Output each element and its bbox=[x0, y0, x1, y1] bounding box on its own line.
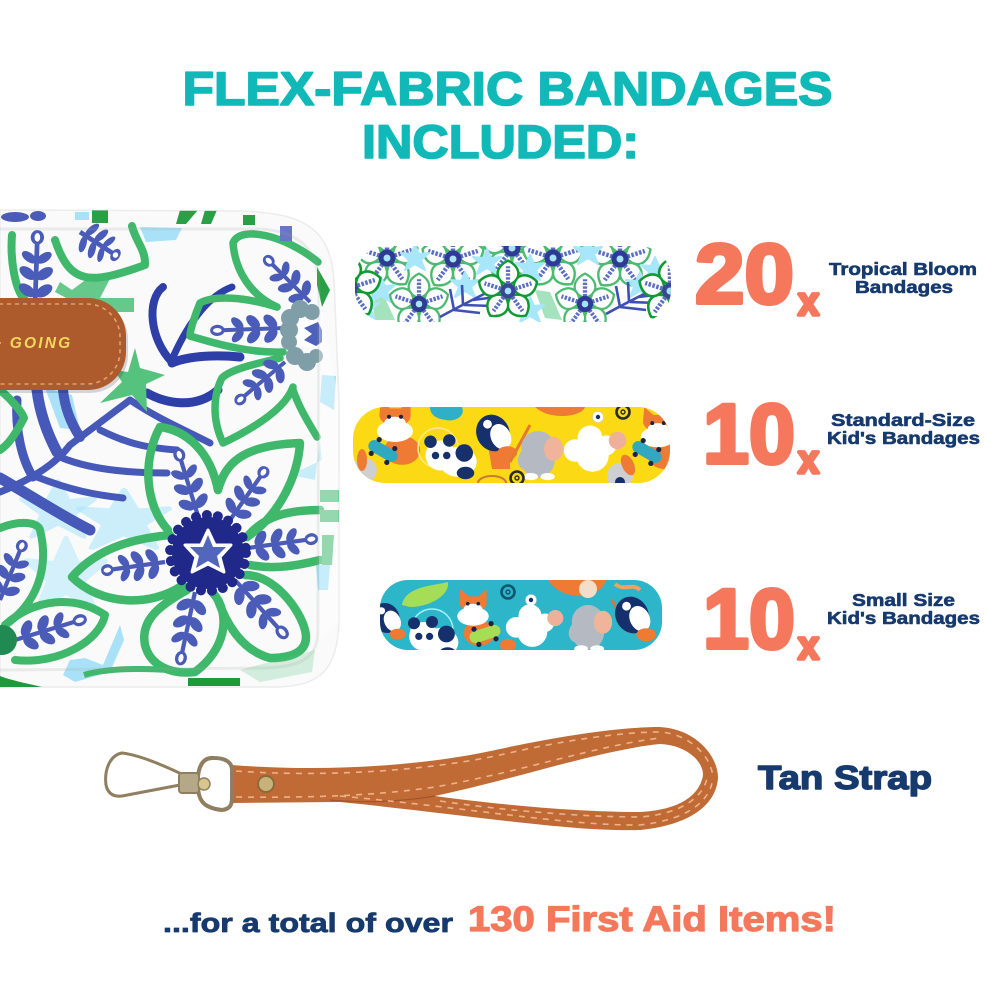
tan wrist strap bbox=[106, 727, 718, 830]
metal clasp bbox=[106, 753, 232, 810]
count: 10x small: x bbox=[798, 624, 819, 668]
upper right flower petals bbox=[190, 234, 318, 443]
leather tab bbox=[0, 298, 128, 393]
pouch with tropical bloom print bbox=[0, 210, 340, 687]
label: small size kids: Small Size bbox=[852, 590, 955, 610]
main fern stems bbox=[0, 390, 210, 530]
count: 10x standard: x bbox=[798, 438, 819, 482]
title: FLEX-FABRIC BANDAGES bbox=[182, 62, 832, 115]
upper right flower centre bbox=[280, 300, 323, 371]
label: tropical bloom: Bandages bbox=[855, 277, 953, 297]
count: 10x small: 10 bbox=[703, 572, 795, 666]
count: 10x standard: x bbox=[798, 438, 819, 482]
label: standard-size kids bbox=[827, 410, 980, 448]
lower left flower petals bbox=[0, 226, 145, 661]
lower left dark green centre bbox=[0, 625, 17, 655]
label: tropical bloom: Tropical Bloom bbox=[829, 259, 977, 279]
main flower petals bbox=[72, 427, 320, 673]
label: small size kids bbox=[827, 590, 980, 628]
label: tropical bloom bbox=[829, 259, 977, 297]
count: 10x standard: 10 bbox=[703, 387, 795, 481]
green cross motifs bbox=[55, 275, 165, 412]
rim strips of print bbox=[92, 210, 330, 307]
main flower centre bbox=[170, 515, 246, 591]
count: 20x tropical bloom: x bbox=[798, 280, 819, 324]
footer line bbox=[163, 900, 836, 939]
label: small size kids: Kid's Bandages bbox=[827, 608, 980, 628]
bandage: small kids bbox=[380, 580, 662, 650]
footer line: ...for a total of over bbox=[163, 908, 454, 938]
title bbox=[182, 62, 832, 168]
dark blue fern bbox=[147, 287, 240, 403]
footer line: 130 First Aid Items! bbox=[468, 900, 836, 939]
label: tan strap: Tan Strap bbox=[758, 759, 932, 796]
clear vinyl rim bbox=[0, 229, 319, 670]
count: 10x small: x bbox=[798, 624, 819, 668]
label: standard-size kids: Kid's Bandages bbox=[827, 428, 980, 448]
bandage: standard-size kids bbox=[353, 407, 670, 483]
count: 20x tropical bloom: x bbox=[798, 280, 819, 324]
bandage: tropical bloom bbox=[355, 246, 671, 322]
rivet bbox=[258, 776, 274, 792]
label: standard-size kids: Standard-Size bbox=[831, 410, 975, 430]
light blue background stars bbox=[22, 212, 336, 682]
flower sprigs bbox=[101, 549, 166, 582]
count: 20x tropical bloom: 20 bbox=[695, 227, 794, 321]
title: INCLUDED: bbox=[362, 115, 639, 168]
